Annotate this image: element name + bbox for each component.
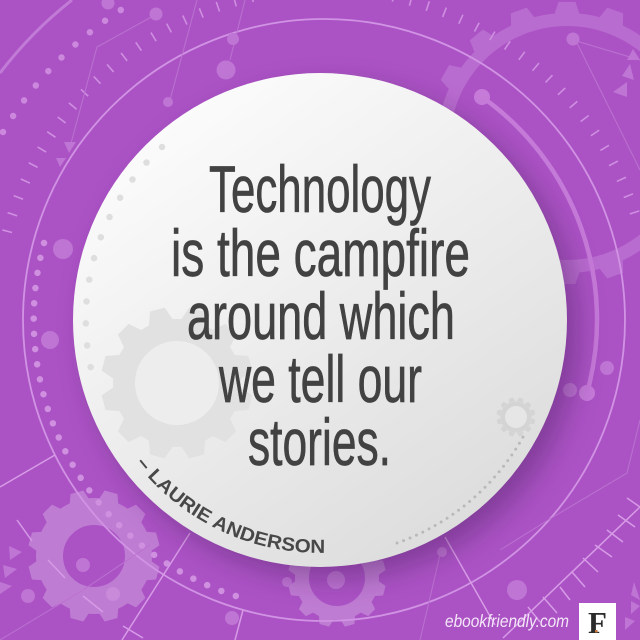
quote text: we tell our	[218, 342, 422, 416]
top-left dot arc	[3, 8, 124, 132]
logo: F	[588, 605, 607, 640]
lower-left dot arc	[34, 243, 246, 599]
large gear on disc	[84, 290, 270, 476]
gear: bottom left	[13, 475, 175, 637]
gear: top right	[426, 2, 640, 284]
disc dots lower right	[397, 437, 523, 543]
disc dots upper left	[86, 147, 162, 369]
attribution: – LAURIE ANDERSON	[140, 460, 324, 553]
quote text	[171, 152, 470, 479]
logo	[579, 603, 616, 640]
outer top-left arc	[0, 0, 72, 73]
connector lines	[0, 455, 640, 640]
quote disc	[73, 73, 567, 567]
quote text: is the campfire	[171, 216, 470, 290]
quote text: stories.	[248, 405, 391, 479]
tick ring	[7, 0, 637, 232]
quote text: around which	[187, 279, 455, 353]
small gear on disc	[492, 393, 540, 441]
inner thick arc	[474, 89, 597, 401]
gear: bottom centre	[277, 518, 397, 638]
website label: ebookfriendly.com	[445, 611, 569, 631]
disc shadow	[85, 85, 579, 579]
quote text: Technology	[209, 152, 431, 226]
